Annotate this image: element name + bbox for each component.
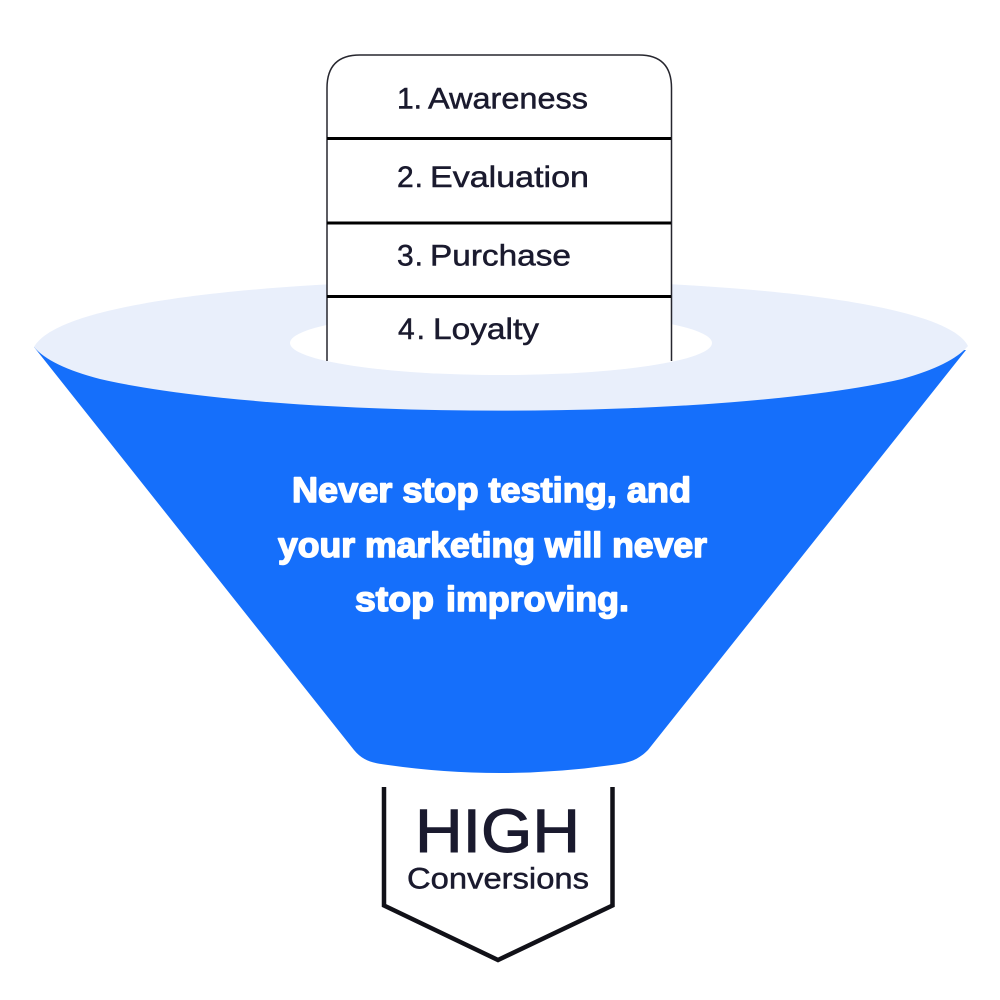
stage 2 label: Evaluation xyxy=(430,161,589,194)
funnel message: improving. xyxy=(446,580,629,619)
result arrow badge xyxy=(384,787,612,960)
stacked stages panel xyxy=(327,55,672,361)
stage 3 label: Purchase xyxy=(430,240,571,272)
funnel rim xyxy=(34,280,968,411)
funnel message xyxy=(278,471,707,619)
stage 1 label: Awareness xyxy=(428,82,588,116)
funnel message: stop xyxy=(355,580,434,619)
funnel message: your marketing will never xyxy=(278,526,707,565)
funnel inner opening xyxy=(290,311,712,375)
stage 2 label: 2. xyxy=(397,161,423,194)
stage 4 label: 4. xyxy=(398,313,425,346)
stage 1 label: 1. xyxy=(397,82,422,116)
stage 3 label: 3. xyxy=(397,240,423,272)
funnel body xyxy=(34,347,966,773)
stage 4 label xyxy=(398,313,539,346)
funnel message: Never stop testing, and xyxy=(292,471,691,510)
HIGH label: HIGH xyxy=(415,797,580,865)
stage 4 label: Loyalty xyxy=(433,313,539,346)
Conversions label: Conversions xyxy=(407,862,589,896)
